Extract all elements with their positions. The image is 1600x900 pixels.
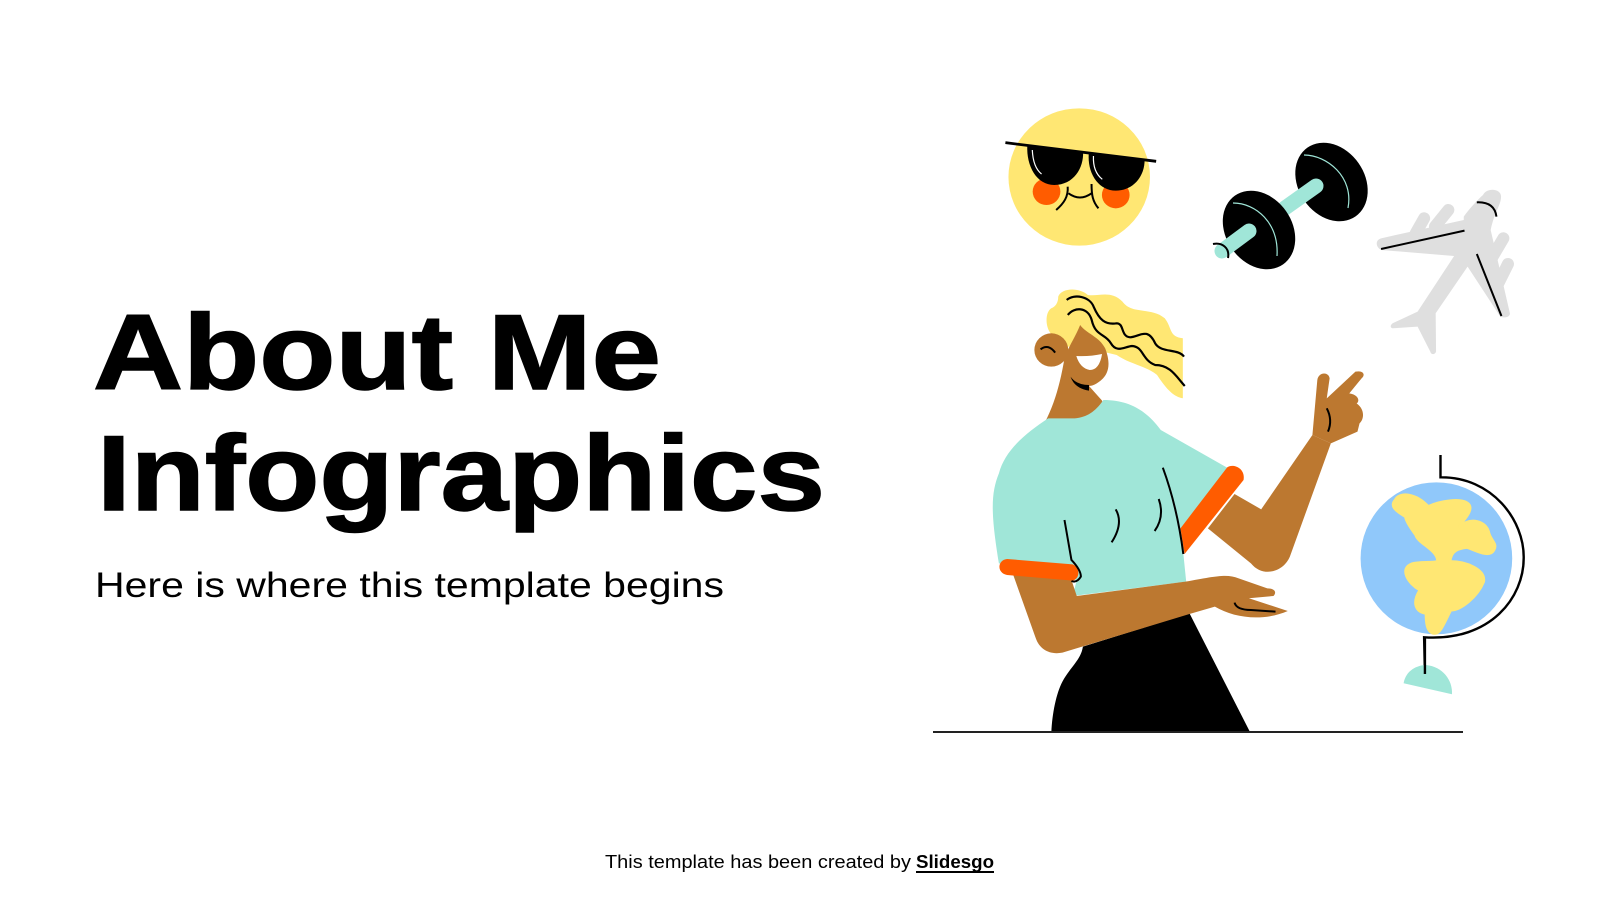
- icon: dumbbell: [1208, 129, 1383, 283]
- title: [93, 292, 825, 533]
- title: About Me: [93, 292, 661, 412]
- icon: airplane: [1377, 190, 1510, 354]
- illustration: woman pointing: [993, 290, 1364, 732]
- ground line: [933, 731, 1463, 733]
- footer credit: This template has been created by: [605, 852, 911, 872]
- icon: globe: [1361, 455, 1524, 694]
- body, shirt and arms: [993, 371, 1364, 732]
- subtitle: Here is where this template begins: [95, 566, 724, 605]
- footer credit: Slidesgo: [916, 852, 994, 872]
- icon: sun with sunglasses: [1005, 108, 1156, 246]
- head and hair: [1034, 290, 1185, 423]
- footer credit: [605, 852, 994, 873]
- title: Infographics: [97, 413, 825, 533]
